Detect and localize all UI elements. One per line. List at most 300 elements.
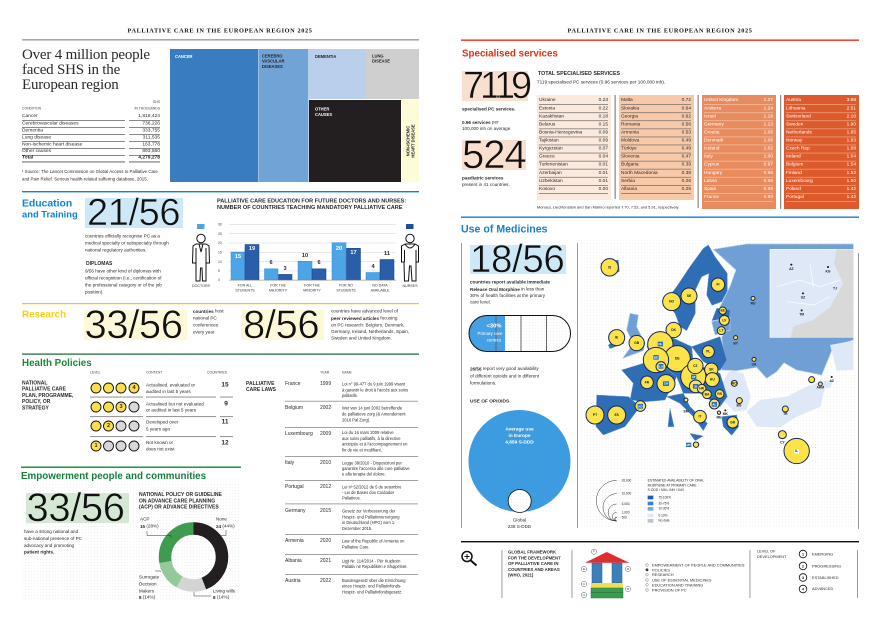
panel: advance care planning donut: Decision <box>139 582 157 586</box>
panel: palliative care laws: fin de vie et modifiant. <box>342 448 382 452</box>
panel: advance care planning donut <box>139 492 236 600</box>
panel: palliative care laws: Loi n° 99-477 du 9 juin 1999 visant <box>342 382 406 386</box>
text block: total specialised services <box>537 71 665 84</box>
stat: 18/56: Release Oral Morphine in less than <box>470 286 545 292</box>
table column: low rates: Serbia <box>621 178 635 184</box>
panel: palliative care laws: palliatifs. <box>342 393 358 398</box>
panel: palliative care laws: in Deutschland (HPG) vom 1. <box>342 520 395 525</box>
panel: palliative care laws: 1999 <box>320 381 331 387</box>
bubble labels: LU <box>659 364 663 368</box>
panel: palliative care laws: Law of the Republic of Armenia on <box>342 538 405 544</box>
table column: medium rates: Israel <box>704 113 716 119</box>
legend: level of development: ESTABLISHED <box>812 575 839 580</box>
panel: palliative care laws: Armenia <box>285 538 304 544</box>
panel background: empowerment <box>21 484 241 600</box>
bubble labels: CZ <box>693 364 698 368</box>
panel: palliative care laws: CARE LAWS <box>246 387 277 393</box>
stat: 8/56 articles: Germany, Ireland, Netherlands, Spain, <box>331 329 409 334</box>
bubbles: use of opioids: USE OF OPIOIDS <box>470 398 510 404</box>
table column: low rates: 0.47 <box>682 154 691 160</box>
table column: medium rates: Iceland <box>704 146 720 152</box>
table column: lowest rates: Kyrgyzstan <box>539 146 563 152</box>
table column: lowest rates: 0.18 <box>599 113 608 119</box>
stat: 33/56 national presence: 33/56 <box>26 486 125 530</box>
stat: 33/56 conferences: national PC <box>193 316 217 320</box>
table column: highest rates: 1.52 <box>847 170 856 176</box>
table: SHS by condition: Cancer <box>22 113 38 119</box>
text block: recognition: national regulatory authorities. <box>85 248 147 252</box>
bubbles: use of opioids: 4,859 S-DDD <box>505 440 534 446</box>
panel: national strategy levels: 1 <box>94 443 98 449</box>
bar chart: countries teaching palliative care: 25 <box>218 232 222 236</box>
russia and eastern region <box>623 244 853 378</box>
table column: medium rates: Croatia <box>704 130 720 136</box>
legend: level of development: LEVEL OF <box>757 548 776 554</box>
stat: 524 paediatric services: paediatric services <box>462 176 504 180</box>
bubble labels: NL <box>658 342 662 346</box>
bubble labels: IS <box>608 265 612 269</box>
bar chart: countries teaching palliative care: MAJORITY <box>269 288 288 292</box>
bubble labels: RU <box>751 302 756 306</box>
panel: palliative care laws: e alla terapia del dolore. <box>342 472 386 476</box>
table dividers <box>614 95 781 209</box>
bubble labels: HU <box>710 378 715 382</box>
table column: lowest rates: 0.01 <box>599 170 608 176</box>
legend: level of development: 1 <box>802 552 805 556</box>
table column: medium rates: 0.96 <box>764 178 773 184</box>
table column: highest rates: 1.42 <box>847 186 856 192</box>
table column: highest rates: Poland <box>786 186 801 192</box>
table column: lowest rates: Tajikistan <box>539 138 559 144</box>
panel: advance care planning donut: NATIONAL POLICY OR GUIDELINE <box>139 492 222 498</box>
panel: national strategy levels: 5 years ago <box>146 426 170 432</box>
bubble labels: AZ <box>789 267 794 271</box>
panel: palliative care laws: NAME <box>342 370 353 374</box>
panel: palliative care laws: Austria <box>285 578 301 584</box>
text block: diplomas <box>85 261 162 294</box>
icon: framework house: E <box>583 567 585 571</box>
table column: medium rates: 1.27 <box>764 97 773 103</box>
bubble labels: IL <box>795 449 798 453</box>
table column: highest rates: Austria <box>786 97 801 103</box>
table column: low rates: Türkiye <box>621 146 637 152</box>
panel: palliative care laws: à garantir le droit à l'accès aux soins <box>342 388 408 392</box>
table column: low rates: Bulgaria <box>621 162 639 168</box>
panel: palliative care laws: Italy <box>285 460 295 466</box>
bar chart: countries teaching palliative care: FOR THE <box>304 284 320 288</box>
table column: lowest rates: 0.23 <box>599 97 608 103</box>
panel: palliative care laws: 2010 <box>320 460 331 466</box>
table: SHS by condition <box>22 100 161 162</box>
icon: nurse: NURSES <box>403 284 418 288</box>
table: SHS by condition: IN THOUSANDS <box>134 106 161 110</box>
table column: highest rates: 1.42 <box>847 194 856 200</box>
section rule: framework <box>461 541 859 542</box>
bar chart: countries teaching palliative care: 15 <box>235 254 241 260</box>
legend: framework components: EDUCATION AND TRAINING <box>652 582 703 587</box>
bar chart: countries teaching palliative care: FOR NO <box>339 284 353 288</box>
table column: lowest rates: Bosnia-Herzegovina <box>539 130 583 136</box>
table column: highest rates: Ireland <box>786 154 801 160</box>
table column: medium rates: Spain <box>704 186 717 192</box>
map legend: availability: 0-10% <box>658 513 668 517</box>
bubble labels: MK <box>723 412 729 416</box>
table: SHS by condition: 311,535 <box>143 134 160 140</box>
panel: palliative care laws: eines Hospiz- und Palliativfonds- <box>342 584 402 588</box>
bubbles: use of opioids: in Europe <box>508 433 531 439</box>
bubble labels: NO <box>669 300 675 304</box>
stat: 33/56 conferences: conferences <box>193 322 219 328</box>
bubble labels: BY <box>733 341 739 345</box>
source note: and Pain Relief. Serious health-related suffering database, 2015. <box>22 176 148 182</box>
treemap: SHS by condition: VASCULAR <box>262 58 284 64</box>
table: SHS by condition: Non-ischemic heart disease <box>22 142 83 148</box>
blue label tags <box>638 342 717 447</box>
treemap: SHS by condition: CAUSES <box>315 112 332 117</box>
section rule: research <box>22 303 419 304</box>
icon: framework house: C <box>583 582 585 586</box>
bubble labels: IT <box>699 415 701 419</box>
table column: low rates: Armenia <box>621 130 639 136</box>
table column: highest rates: 1.50 <box>847 178 856 184</box>
header: left page: PALLIATIVE CARE IN THE EUROPEAN REGION 2025 <box>128 28 312 34</box>
legend: level of development: ADVANCED <box>812 586 834 591</box>
panel: advance care planning donut: None <box>216 516 227 522</box>
table column: medium rates: 1.02 <box>764 146 773 152</box>
table column: medium rates: 1.13 <box>764 121 773 127</box>
map legend: bubble size: 20,000 <box>622 478 632 482</box>
table column: lowest rates: 0.09 <box>599 138 608 144</box>
treemap: SHS by condition: DISEASES <box>262 64 283 69</box>
legend: framework components <box>646 562 745 592</box>
bubble labels: CY <box>780 440 785 444</box>
table column: lowest rates: Uzbekistan <box>539 178 563 184</box>
light availability countries <box>720 341 853 427</box>
icon: nurse <box>402 224 418 288</box>
table column: low rates: Malta <box>621 97 633 103</box>
table column: highest rates <box>784 95 859 209</box>
bar chart: countries teaching palliative care: 6 <box>317 260 321 266</box>
table column: highest rates: 1.85 <box>847 130 856 136</box>
table column: highest rates: Lithuania <box>786 105 806 111</box>
treemap: SHS by condition <box>170 49 419 182</box>
table column: low rates: Romania <box>621 121 641 127</box>
bubble labels: KG <box>825 269 831 273</box>
text block: global framework <box>508 550 561 578</box>
table column: medium rates: France <box>704 194 719 200</box>
panel: national strategy levels: Developed over <box>146 420 179 424</box>
panel: palliative care laws: 2012 <box>320 484 331 490</box>
panel: palliative care laws: Lei nº 52/2012 de 5 de setembro <box>342 484 402 490</box>
table column: lowest rates: Kazakhstan <box>539 113 564 119</box>
table column: low rates: 0.26 <box>682 178 691 184</box>
panel: palliative care laws: Palliative Care. <box>342 544 370 550</box>
panel: national strategy levels: does not exist <box>146 446 175 452</box>
pill: under 30% primary care centres: centres <box>487 338 502 342</box>
table column: medium rates: 1.16 <box>764 113 773 119</box>
table: SHS by condition: 163,778 <box>142 142 160 148</box>
table column: lowest rates: Belarus <box>539 121 556 127</box>
bubble labels: GR <box>730 420 736 424</box>
panel: advance care planning donut: 24 (44%) <box>216 524 235 528</box>
high availability countries <box>596 245 739 441</box>
table column: highest rates: 1.68 <box>847 146 856 152</box>
bubble labels: EE <box>720 309 726 313</box>
bubble labels: RS <box>717 392 723 396</box>
bubble labels: LT <box>719 329 723 333</box>
map legend: bubble size: 10,000 <box>622 492 632 496</box>
panel: palliative care laws: Dezember 2015. <box>342 526 372 531</box>
stat: 18/56: countries report available Immediate <box>470 280 550 284</box>
bar chart: countries teaching palliative care: 10 <box>218 260 222 264</box>
header: right page: PALLIATIVE CARE IN THE EUROPEAN REGION 2025 <box>568 28 752 34</box>
bubble labels: SK <box>709 368 714 372</box>
stat: 524 paediatric services: 524 <box>462 133 526 177</box>
stat: 8/56 articles: on PC research: Belgium, Denmark, <box>331 322 405 328</box>
heading: education and training <box>22 198 78 220</box>
heading: health policies: Health Policies <box>22 358 92 369</box>
table column: medium rates: Cyprus <box>704 162 720 168</box>
section rule: education <box>22 191 419 192</box>
panel: palliative care laws: Paliativos. <box>342 496 361 500</box>
table column: medium rates: 0.96 <box>764 170 773 176</box>
table column: low rates: 0.49 <box>682 146 691 152</box>
stat: 33/56 national presence: advocacy and promoting <box>24 543 74 548</box>
table column: low rates: 0.64 <box>682 105 691 111</box>
legend: framework components: EMPOWERMENT OF PEOPLE AND COMMUNITIES <box>652 562 745 568</box>
icon: framework house: B <box>627 587 629 591</box>
panel: palliative care laws: France <box>285 381 301 387</box>
stat: 8/56 articles <box>241 303 409 347</box>
table column: highest rates: Finland <box>786 170 802 176</box>
table: SHS by condition: 736,226 <box>142 120 160 126</box>
text block: opioids availability: 26/56 report very good availability <box>470 366 539 371</box>
bar chart: countries teaching palliative care <box>218 222 396 292</box>
icon: magnifier <box>462 552 476 566</box>
stat: 7119 services: 0.96 services per <box>462 120 499 124</box>
panel: palliative care laws: de palliatieve zorg (& Amendement <box>342 412 406 416</box>
table column: low rates: 0.53 <box>682 130 691 136</box>
panel: national strategy levels: 4 <box>132 385 136 391</box>
bubble labels: SI <box>694 384 697 388</box>
stat: 18/56: 18/56 <box>470 238 564 281</box>
text block: recognition: medical specialty or subspecialty through <box>85 240 169 246</box>
table column: low rates: 0.56 <box>682 121 691 127</box>
map legend: availability: S-DDD / MILL INH / DAY <box>648 488 685 492</box>
text block: diplomas: 9/56 have other kind of diplomas with <box>85 268 161 274</box>
text block: global framework: GLOBAL FRAMEWORK <box>508 550 557 554</box>
bubble labels: AT <box>692 375 696 379</box>
chart title: NUMBER OF COUNTRIES TEACHING MANDATORY PALLIATIVE CARE <box>217 205 403 211</box>
table: SHS by condition: Other causes <box>22 148 52 154</box>
icon: framework house: A <box>583 593 585 597</box>
heading: specialised services: Specialised services <box>462 48 558 60</box>
map legend: availability <box>648 479 704 523</box>
table column: highest rates: Luxembourg <box>786 178 813 184</box>
panel: national strategy levels: STRATEGY <box>22 406 50 412</box>
source note: ¹ Source: The Lancet Commission on Global Access to Palliative Care <box>22 169 158 174</box>
bubble labels: FI <box>717 283 720 287</box>
table column: highest rates: Norway <box>786 138 803 144</box>
icon: doctor <box>192 224 211 288</box>
table column: lowest rates: 0.01 <box>599 162 608 168</box>
table column: medium rates: 1.00 <box>764 154 773 160</box>
treemap: SHS by condition: DEMENTIA <box>315 54 336 59</box>
table column: highest rates: 2.10 <box>847 113 856 119</box>
table column: highest rates: Sweden <box>786 121 804 127</box>
table column: low rates: Slovenia <box>621 154 640 160</box>
section rule: medicines <box>461 216 859 218</box>
table column: low rates: North Macedonia <box>621 170 658 176</box>
table column: lowest rates: Azerbaijan <box>539 170 562 176</box>
panel: national strategy levels: Actualised but not evaluated <box>146 402 204 406</box>
bubbles: use of opioids: Average use <box>505 426 534 432</box>
bubble labels: BG <box>736 404 742 408</box>
table column: highest rates: 3.68 <box>847 97 856 103</box>
panel: national strategy levels: LEVEL <box>90 370 101 374</box>
bubble labels: RO <box>732 381 737 385</box>
panel: palliative care laws: anticipée et à l'accompagnement en <box>342 442 408 446</box>
stat: 18/56 <box>470 238 566 304</box>
panel: palliative care laws: Hospiz- und Palliativversorgung <box>342 514 400 520</box>
table column: highest rates: 2.51 <box>847 105 856 111</box>
bubble labels: LV <box>722 318 727 322</box>
stat: 33/56 national presence <box>24 486 129 554</box>
panel: national strategy levels: PLAN, PROGRAMME, <box>22 393 74 399</box>
table: SHS by condition: CONDITION <box>22 106 42 110</box>
text block: global framework: OF PALLIATIVE CARE IN <box>508 561 558 566</box>
table column: lowest rates: 0.00 <box>599 186 608 192</box>
panel: national strategy levels: 12 <box>221 440 229 446</box>
table column: lowest rates: 0.09 <box>599 130 608 136</box>
legend: framework components: RESEARCH <box>652 572 674 577</box>
table column: low rates: 0.49 <box>682 138 691 144</box>
table column: highest rates: Czech Rep <box>786 146 810 152</box>
bar chart: countries teaching palliative care: 5 <box>218 269 220 273</box>
table column: low rates: 0.72 <box>682 97 691 103</box>
table: SHS by condition: 333,755 <box>142 128 160 134</box>
bubble labels: DE <box>675 357 680 361</box>
table column: low rates: 0.39 <box>682 162 691 168</box>
stat: 33/56 national presence: have a strong national and <box>24 529 79 534</box>
label tag: israel <box>794 449 799 453</box>
panel: palliative care laws: Hospiz- und Palliativfondsgesetz. <box>342 590 402 594</box>
bar chart: countries teaching palliative care: MINORITY <box>303 288 321 292</box>
text block: diplomas: the professional category or of the job <box>85 282 162 288</box>
panel: advance care planning donut: 15 (28%) <box>140 524 159 528</box>
table column: low rates: 0.38 <box>682 170 691 176</box>
bubble labels: AZ <box>829 379 834 383</box>
bar chart: countries teaching palliative care: 20 <box>218 241 222 245</box>
map legend: bubble size: 500 <box>622 515 627 519</box>
table column: medium rates: Germany <box>704 121 724 127</box>
bar chart: countries teaching palliative care: 20 <box>336 246 342 252</box>
table: SHS by condition: Total <box>22 154 34 160</box>
text block: diplomas: position). <box>85 290 104 294</box>
footnote: small states: Monaco, Liechtenstein and San Marino reported 7.70, 7.53, and 5.91, respectively. <box>537 204 679 210</box>
table: SHS by condition: 1,818,424 <box>138 113 160 119</box>
bar chart: countries teaching palliative care: AVAILABLE <box>371 288 390 292</box>
bubble labels: PL <box>706 350 710 354</box>
bar chart: countries teaching palliative care: 11 <box>384 251 390 257</box>
table column: medium rates: Denmark <box>704 138 724 144</box>
table column: low rates: Albania <box>621 186 637 192</box>
table: SHS by condition: Cerebrovascular diseases <box>22 120 79 126</box>
panel: palliative care laws: Loi du 16 mars 2009 relative <box>342 430 394 435</box>
map legend: availability: MORPHINE AT PRIMARY CARE <box>648 483 697 487</box>
bubble labels: BE <box>654 355 658 359</box>
stat: 7119 services: 7119 <box>463 65 531 107</box>
framework dividers <box>502 550 858 598</box>
legend: level of development: EMERGING <box>812 552 833 556</box>
table column: highest rates: 1.64 <box>847 154 856 160</box>
panel: national strategy levels: COUNTRIES <box>207 370 228 374</box>
heading: over 4 million people: faced SHS in the <box>22 62 121 78</box>
panel: palliative care laws: 2015 <box>320 508 331 514</box>
legend: level of development: 2 <box>802 564 805 568</box>
capital markers <box>724 264 833 411</box>
table column: low rates: 0.25 <box>682 186 691 192</box>
stat: 8/56 articles: countries have advanced level of <box>331 308 399 314</box>
icon: framework house: D <box>627 567 629 571</box>
panel: national strategy levels: 3 <box>119 404 123 410</box>
table column: low rates <box>619 95 694 200</box>
bar chart: countries teaching palliative care: 19 <box>249 246 255 252</box>
map legend: availability: No data <box>658 519 670 523</box>
heading: research: Research <box>22 310 66 320</box>
icon: framework house: F <box>593 550 595 554</box>
bar chart: countries teaching palliative care: 3 <box>283 266 287 272</box>
bar chart: countries teaching palliative care: 0 <box>218 278 220 282</box>
bar chart: countries teaching palliative care: 6 <box>269 260 273 266</box>
panel: advance care planning donut: 8 (14%) <box>213 594 230 600</box>
bubble labels: MT <box>687 443 691 447</box>
bubble labels: PT <box>593 413 597 417</box>
panel: national strategy levels: POLICY, OR <box>22 399 51 405</box>
pill: under 30% primary care centres: Primary care <box>478 331 503 336</box>
text block: diplomas: official recognition (i.e., certification of <box>85 276 162 280</box>
stat: 18/56: care level. <box>470 300 491 304</box>
bar chart: countries teaching palliative care: STUDENTS <box>336 288 356 292</box>
bubble labels: FR <box>645 380 650 384</box>
panel: palliative care laws: Albania <box>285 558 302 564</box>
table column: lowest rates: Turkmenistan <box>539 162 568 168</box>
bubble labels: ARM <box>817 386 824 390</box>
icon: framework house <box>581 549 631 598</box>
bubble labels: GB <box>634 341 640 345</box>
panel: palliative care laws: Legge 38/2010 - Disposizioni per <box>342 460 402 466</box>
table: SHS by condition: 4,279,278 <box>138 154 160 160</box>
table column: medium rates: Hungary <box>704 170 723 176</box>
table column: highest rates: Netherlands <box>786 130 812 136</box>
panel: palliative care laws: 2009 <box>320 431 331 437</box>
panel: national strategy levels: NATIONAL <box>22 380 47 386</box>
legend: level of development: PROGRESSING <box>812 564 841 568</box>
table column: highest rates: 1.83 <box>847 138 856 144</box>
legend: framework components: PROVISION OF PC <box>652 588 687 592</box>
bubble labels: TJ <box>833 286 837 290</box>
bubble labels: IE <box>615 336 619 340</box>
heading: over 4 million people: European region <box>22 77 119 93</box>
treemap: SHS by condition: CANCER <box>175 54 193 59</box>
treemap: SHS by condition: CEREBRO <box>262 54 283 58</box>
panel: palliative care laws: Ligji Nr. 114/2014 - Për Kujdesin <box>342 558 401 564</box>
stat: 8/56 articles: 8/56 <box>243 303 319 347</box>
stat: 18/56: 30% of health facilities at the primary <box>470 293 546 298</box>
bubble labels: SM <box>683 410 689 414</box>
table column: medium rates: 1.06 <box>764 138 773 144</box>
bar chart: countries teaching palliative care: 30 <box>218 222 222 226</box>
